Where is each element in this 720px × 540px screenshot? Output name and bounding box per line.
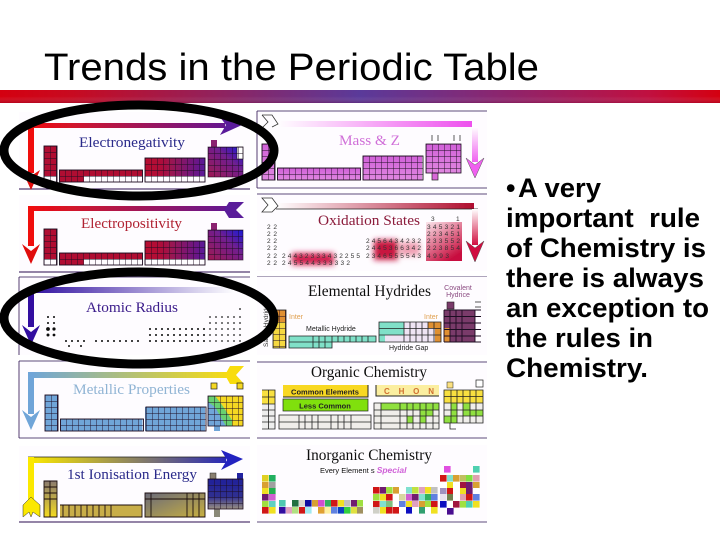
block: covalent hydrides [444, 302, 481, 342]
colour cells: left column [262, 475, 276, 514]
colour cells: f block [279, 500, 370, 514]
colour cells: p block [440, 466, 480, 515]
label: organic chemistry: Organic Chemistry [311, 364, 427, 381]
bullet text: an exception to [506, 293, 709, 323]
colour cells: d block [373, 487, 438, 514]
bullet text: Chemistry. [506, 353, 648, 383]
oxidation numbers: 2 4 4 3 2 3 3 3 4 3 2 2 5 5 [282, 253, 360, 260]
label: inter [289, 314, 439, 321]
arrow: ionisation trend [23, 450, 243, 517]
bullet text [506, 173, 709, 383]
key: less common [283, 399, 368, 411]
bullet text: of Chemistry is [506, 233, 706, 263]
atomic size dots [45, 308, 243, 347]
bullet text: A very [518, 173, 601, 203]
oxidation numbers: 3 [431, 216, 435, 223]
title: Trends in the Periodic Table [44, 47, 539, 89]
label: elemental hydrides: Elemental Hydrides [308, 283, 431, 300]
panel: first ionisation energy [19, 446, 250, 522]
key: CHON: C H O N [384, 387, 434, 396]
bullet text: • [506, 173, 515, 203]
mini table [44, 140, 243, 182]
arrow: electronegativity trend [22, 117, 242, 190]
label: covalent hydride: Covalent [444, 285, 472, 292]
oxidation numbers: 2 4 4 5 3 6 6 3 4 2 [366, 245, 421, 252]
label: electropositivity: Electropositivity [81, 216, 183, 232]
bullet text: there is always [506, 263, 704, 293]
arrow: electropositivity trend [22, 202, 244, 264]
oxidation heat blurs [292, 240, 420, 265]
oxidation p block shade [426, 222, 462, 261]
ring: atomic radius highlight [4, 272, 274, 364]
panel: metallic properties [19, 361, 250, 438]
oxidation numbers: 2 3 4 6 5 5 5 5 4 3 [366, 253, 421, 260]
key: less common: Less Common [299, 402, 351, 410]
panel: electropositivity [19, 195, 250, 272]
label: saline hydride: Saline Hydride [263, 304, 270, 347]
panel: electronegativity [19, 112, 250, 190]
oxidation numbers: 2 2 [267, 224, 277, 231]
block: metallic hydrides [289, 336, 376, 348]
arrow: atomic radius trend [22, 287, 234, 345]
mini table [44, 223, 243, 265]
label: mass and Z: Mass & Z [339, 133, 400, 149]
panel: atomic radius [19, 277, 250, 355]
label: electronegativity: Electronegativity [79, 135, 186, 151]
key: CHON [376, 385, 439, 396]
label: metallic properties: Metallic Properties [73, 382, 190, 398]
table: organic left column [262, 390, 275, 429]
oxidation numbers: 2 2 [267, 238, 277, 245]
block: transition hydrides [379, 322, 441, 342]
oxidation numbers: 2 4 5 5 4 4 3 3 3 3 3 2 [282, 260, 350, 267]
label: oxidation states: Oxidation States [318, 213, 420, 229]
panel: inorganic chemistry [257, 445, 487, 522]
oxidation numbers: 2 2 3 8 5 4 [427, 245, 460, 252]
oxidation numbers: 2 2 [267, 260, 277, 267]
label: inter: Inter [424, 314, 439, 321]
label: atomic radius: Atomic Radius [86, 300, 178, 316]
mini table [44, 473, 243, 517]
table: organic p block [444, 380, 483, 429]
panel: mass and Z [257, 111, 487, 188]
oxidation numbers: 1 [456, 216, 460, 223]
bullet text: important rule [506, 203, 700, 233]
ring: electronegativity highlight [4, 105, 274, 196]
key: common elements [283, 385, 368, 397]
red header bar [0, 90, 720, 103]
arrow: oxidation trend [262, 198, 484, 262]
oxidation numbers: 2 2 [267, 231, 277, 238]
panel: oxidation states [257, 194, 487, 277]
label: metallic hydride: Metallic Hydride [306, 326, 356, 333]
label: every element is special: Every Element s Special [320, 465, 407, 475]
oxidation numbers: 3 4 5 3 2 1 [427, 224, 460, 231]
label: covalent hydride: Hydrice [446, 292, 470, 299]
label: inorganic chemistry: Inorganic Chemistry [306, 447, 432, 464]
panel: organic chemistry [257, 362, 487, 438]
panel: elemental hydrides [257, 277, 487, 355]
label: 1st ionisation energy: 1st Ionisation Energy [67, 467, 198, 483]
oxidation numbers: 2 2 [267, 245, 277, 252]
arrow: metallic trend [22, 366, 244, 430]
arrow: mass trend [262, 115, 484, 178]
mini table [262, 135, 461, 180]
bullet text: the rules in [506, 323, 653, 353]
mini table [45, 383, 243, 431]
key: common elements: Common Elements [291, 388, 359, 396]
oxidation numbers: 2 2 [267, 253, 277, 260]
label: hydride gap: Hydride Gap [389, 345, 428, 352]
oxidation numbers: 2 2 3 4 5 1 [427, 231, 460, 238]
table: organic f block [279, 415, 371, 429]
block: saline column [273, 310, 286, 348]
table: organic d block [374, 403, 439, 429]
oxidation numbers: 2 3 3 5 5 2 [427, 238, 460, 245]
oxidation numbers: 2 4 5 6 4 3 4 2 3 2 [366, 238, 421, 245]
oxidation numbers [267, 216, 460, 267]
oxidation numbers: 4 9 9 3 [427, 253, 449, 260]
label: covalent hydride [444, 285, 472, 299]
label: inter: Inter [289, 314, 304, 321]
